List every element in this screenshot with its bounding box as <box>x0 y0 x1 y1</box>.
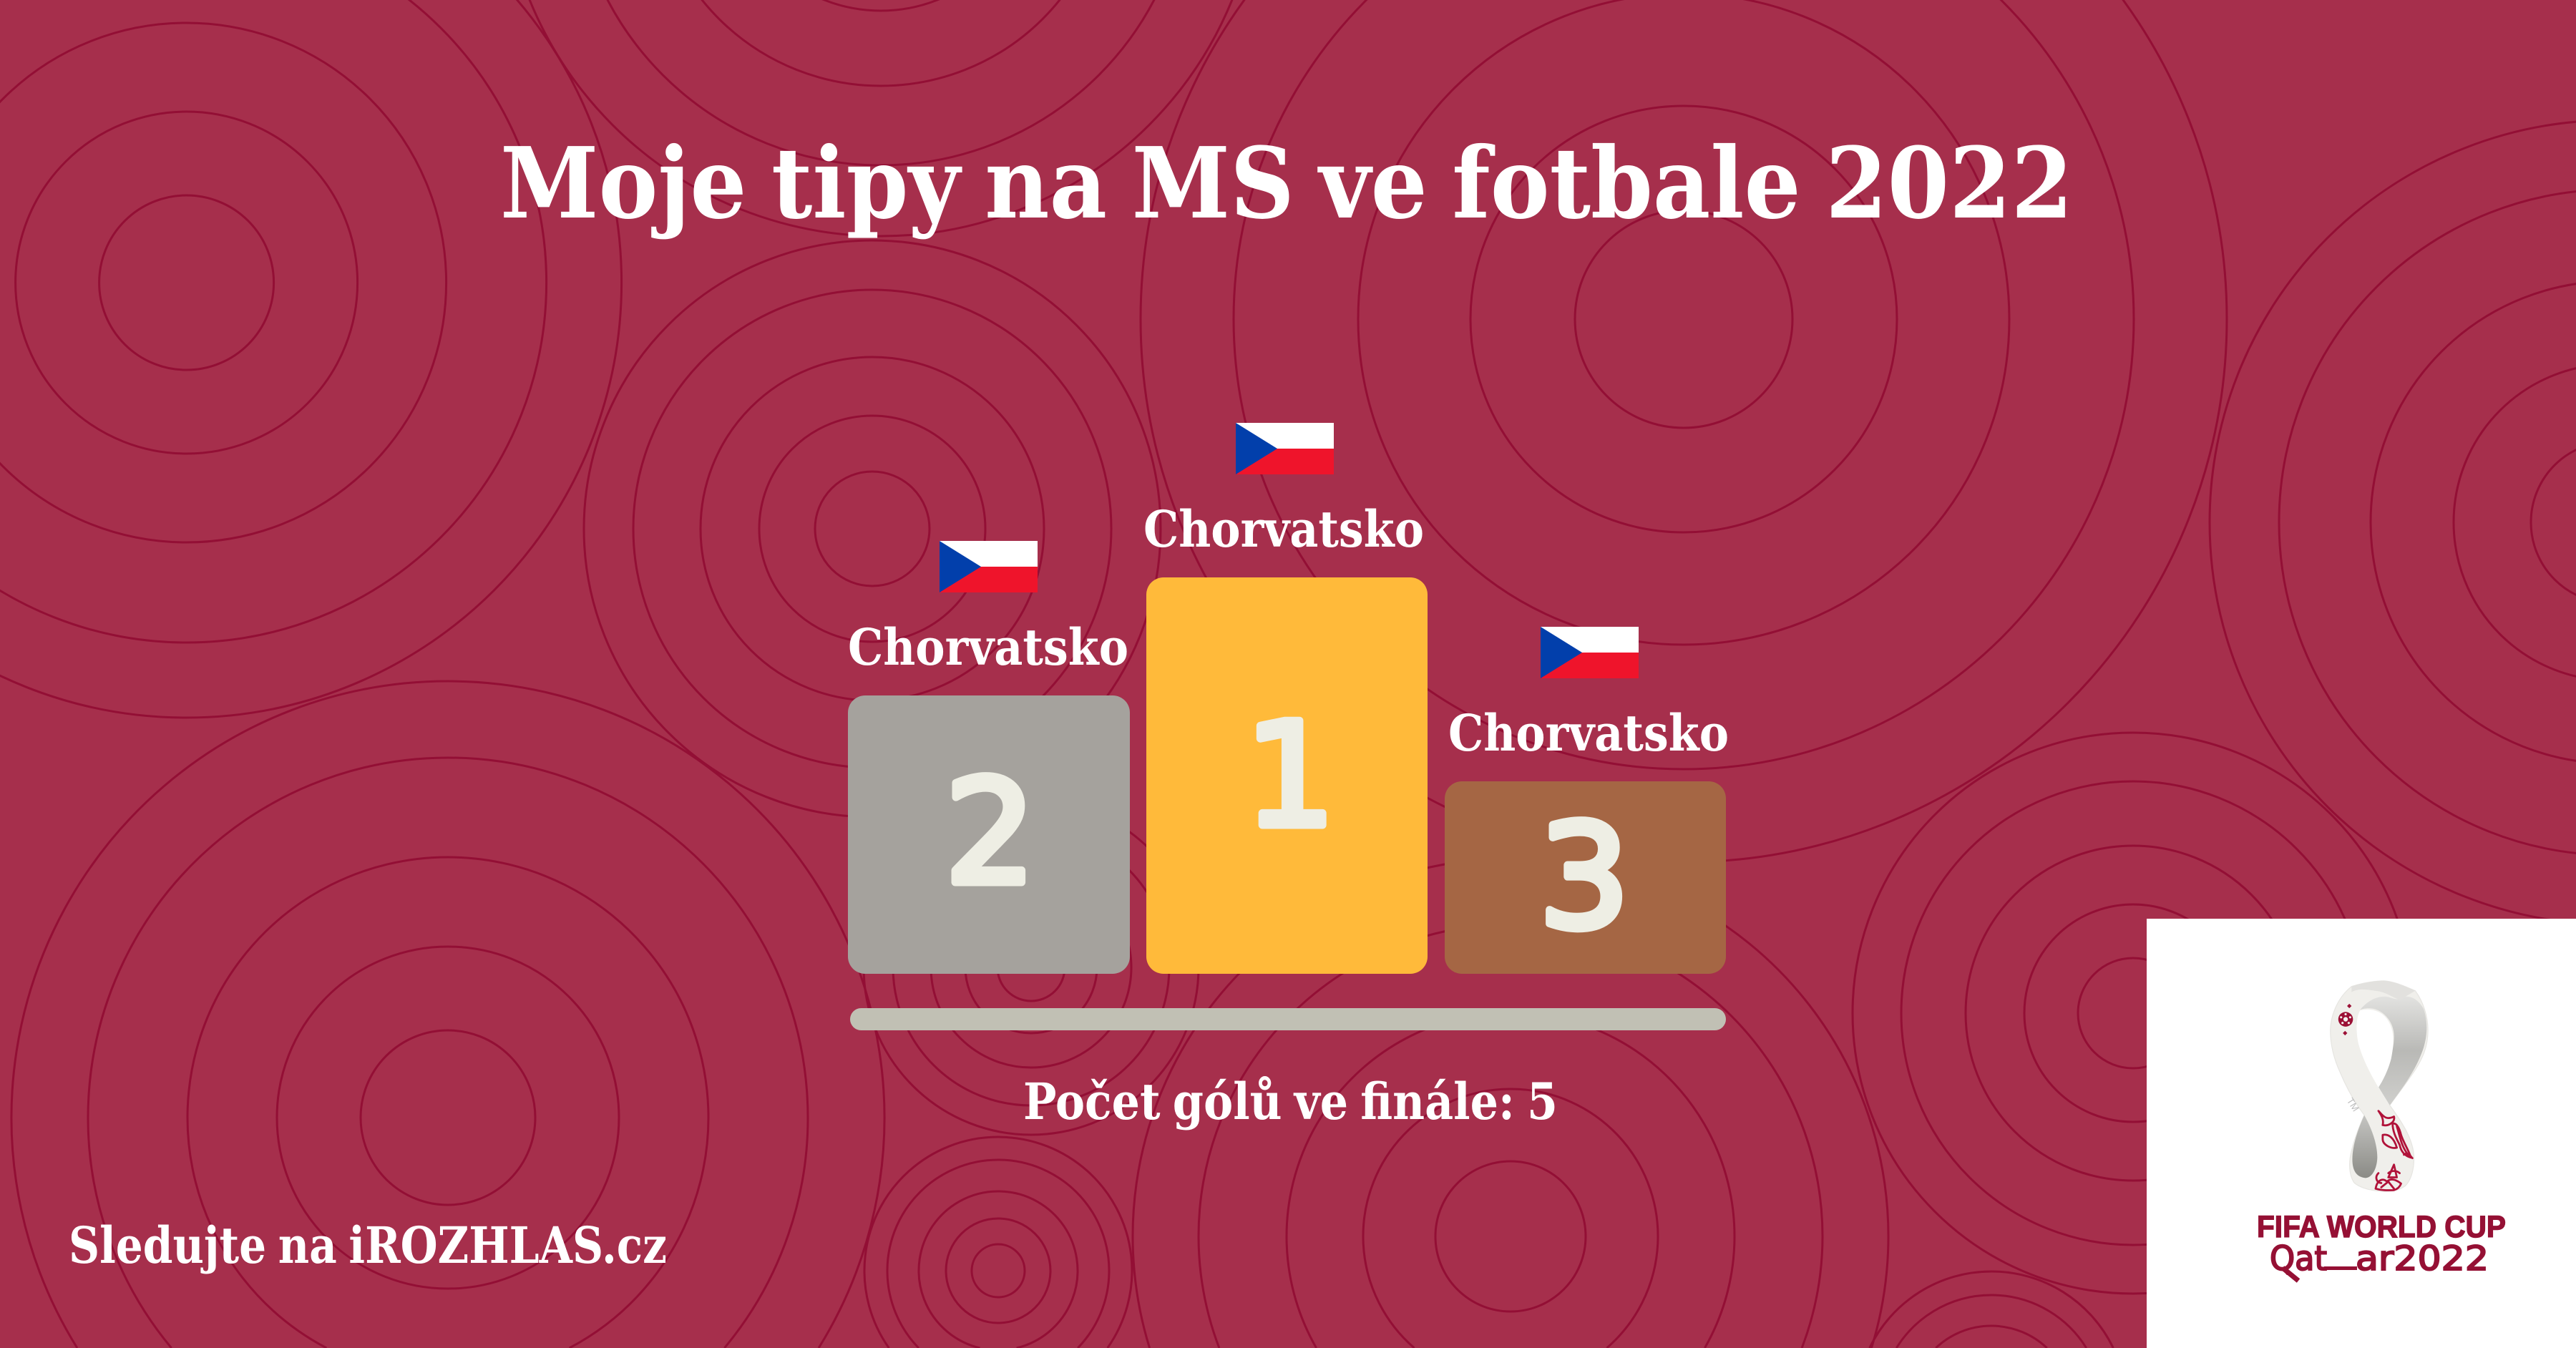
podium <box>848 577 1726 1030</box>
logo text Qatar2022 <box>2270 1239 2489 1281</box>
emblem floral ornaments <box>2376 1111 2412 1191</box>
flag place 3 <box>1541 627 1639 678</box>
icon: world cup emblem <box>2331 981 2428 1191</box>
podium place 3 block <box>1445 781 1726 974</box>
label place 2: Chorvatsko <box>848 617 1128 677</box>
label place 1: Chorvatsko <box>1143 499 1424 559</box>
trademark: TM <box>2345 1096 2361 1113</box>
podium place 2 block: 2 <box>945 750 1036 917</box>
logo text Qatar2022: Qat <box>2270 1239 2327 1279</box>
label place 3: Chorvatsko <box>1448 703 1729 763</box>
goals in final text: Počet gólů ve finále: 5 <box>1023 1072 1558 1131</box>
flag place 2 <box>940 541 1038 592</box>
logo panel <box>2147 919 2576 1348</box>
podium place 1 block <box>1146 577 1428 974</box>
icon: ball on emblem <box>2338 1004 2353 1035</box>
logo text FIFA WORLD CUP: FIFA WORLD CUP <box>2257 1210 2506 1244</box>
podium place 2 block <box>848 695 1130 974</box>
follow text: Sledujte na iROZHLAS.cz <box>69 1216 667 1275</box>
podium place 3 block: 3 <box>1538 794 1630 961</box>
podium base bar <box>850 1008 1726 1030</box>
title: Moje tipy na MS ve fotbale 2022 <box>500 126 2073 241</box>
logo text Qatar2022: ar2022 <box>2356 1239 2489 1279</box>
podium place 1 block: 1 <box>1244 693 1336 859</box>
flag place 1 <box>1236 423 1334 474</box>
